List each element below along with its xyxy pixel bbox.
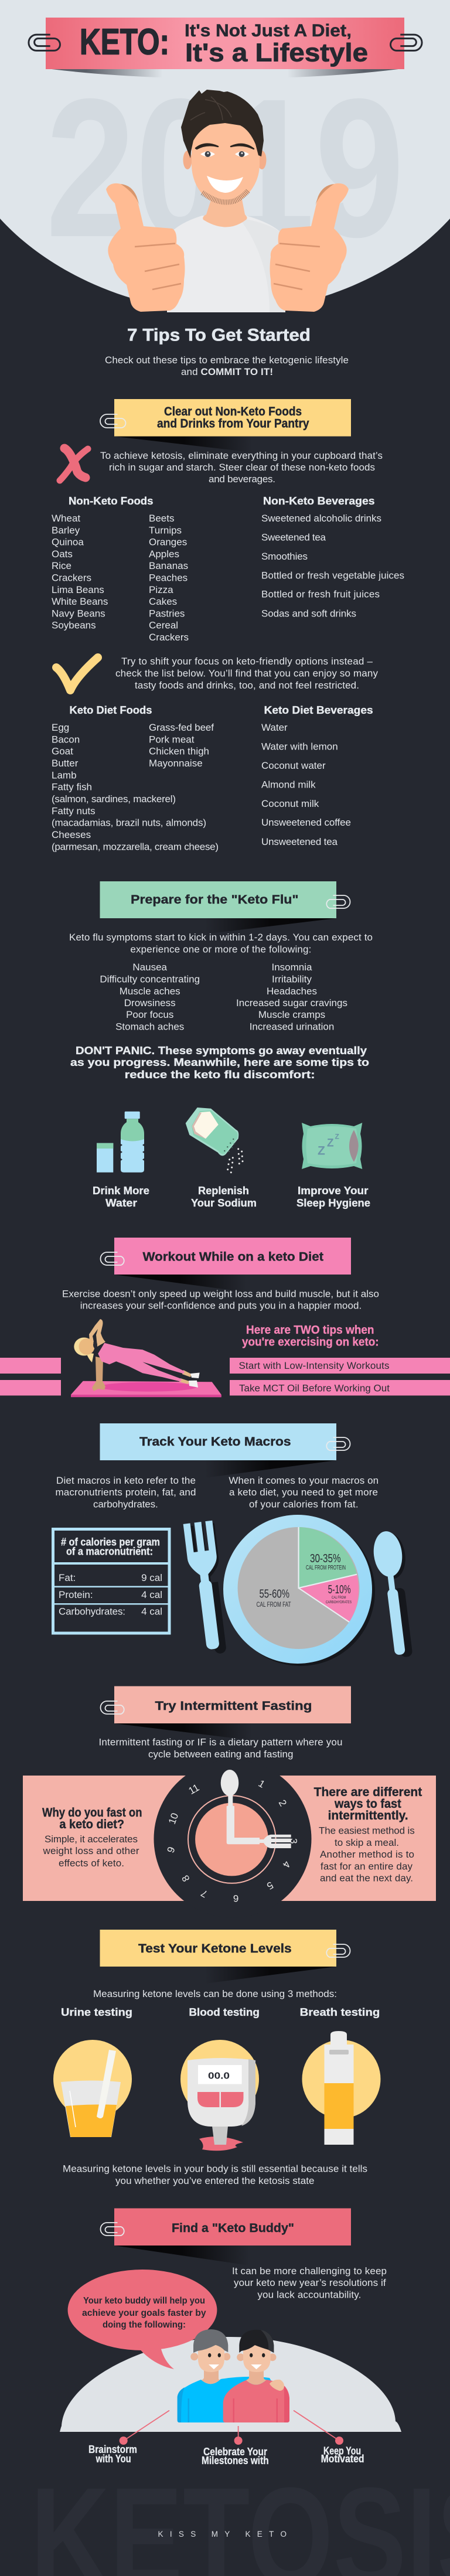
tip bar: low intensity — [230, 1358, 450, 1374]
text: ways to fast: intermittently. — [328, 1809, 408, 1822]
title: KETO: KETO: — [80, 22, 169, 62]
intro text: Check out these tips to embrace the ketogenic lifestyle — [105, 355, 349, 366]
icon: blood glucose meter: 00.0 — [208, 2071, 230, 2081]
list: non-keto foods: Crackers — [52, 572, 91, 584]
clock numbers: 7 — [199, 1887, 209, 1900]
text: why fast — [42, 1806, 142, 1869]
tip labels: Water — [105, 1197, 137, 1209]
pie label: carbohydrates: CARBOHYDRATES — [326, 1600, 352, 1604]
list: keto diet beverages: Unsweetened tea — [261, 836, 338, 847]
text: why fast: Why do you fast on — [42, 1806, 142, 1819]
list: non-keto foods: Turnips — [149, 524, 182, 536]
icon: left paperclip — [29, 35, 60, 50]
list: non-keto foods: Crackers — [149, 632, 189, 643]
table: calories per gram: Carbohydrates: — [59, 1606, 125, 1617]
table: calories per gram: 4 cal — [141, 1589, 162, 1600]
list: symptoms left: Stomach aches — [115, 1021, 184, 1033]
paragraph: keto-friendly options: Try to shift your focus on keto-friendly options instead – — [121, 656, 373, 667]
paragraph: macros left: carbohydrates. — [93, 1499, 158, 1510]
list: non-keto beverages: Bottled or fresh vegetable juices — [261, 570, 404, 581]
tip labels — [93, 1185, 370, 1209]
pie label: fat: 55-60% — [259, 1588, 289, 1601]
pie label: protein: CAL FROM PROTEIN — [306, 1564, 346, 1571]
list: keto diet beverages — [261, 704, 373, 847]
list: non-keto foods: Oranges — [149, 537, 187, 548]
label: brainstorm: Brainstorm — [88, 2444, 137, 2455]
tip labels: Improve Your — [298, 1185, 368, 1197]
paragraph: macros right: of your calories from fat. — [249, 1499, 359, 1510]
list: keto diet beverages: Water — [261, 722, 288, 733]
list: non-keto beverages: Smoothies — [261, 551, 308, 562]
speech bubble — [68, 2270, 217, 2369]
pie label: protein — [306, 1552, 346, 1571]
pie label: fat: CAL FROM FAT — [257, 1600, 291, 1609]
table: calories per gram: # of calories per gram — [61, 1536, 160, 1548]
list: non-keto foods: Soybeans — [52, 620, 96, 631]
table: calories per gram: Protein: — [59, 1589, 93, 1600]
paragraph: measuring essential: Measuring ketone levels in your body is still essential because it tells — [63, 2163, 367, 2175]
label: celebrate — [202, 2446, 269, 2466]
subheading: two tips: you're exercising on keto: — [242, 1336, 379, 1349]
list: keto diet beverages: Unsweetened coffee — [261, 817, 351, 828]
clock numbers — [165, 1778, 299, 1904]
list: keto diet foods: Pork meat — [149, 734, 195, 745]
paragraph: macros left — [55, 1475, 196, 1510]
speech bubble: Your keto buddy will help you — [83, 2296, 205, 2306]
clock numbers: 1 — [257, 1778, 267, 1790]
label: motivated: Keep You — [323, 2445, 361, 2456]
list: non-keto foods: Rice — [52, 560, 71, 571]
paragraph: intermittent fasting: Intermittent fasting or IF is a dietary pattern where you — [98, 1737, 342, 1747]
section banner: clear out non-keto foods: Clear out Non-Keto Foods — [164, 405, 302, 418]
illustration: smiling man with thumbs up — [106, 90, 349, 312]
list: keto diet foods: Butter — [52, 758, 79, 769]
list: non-keto foods: Quinoa — [52, 537, 84, 548]
chart: plate pie of macros — [223, 1515, 375, 1666]
paragraph: accountability — [232, 2265, 387, 2300]
list: symptoms right: Irritability — [272, 973, 312, 984]
list: non-keto foods: Non-Keto Foods — [69, 495, 154, 507]
list: non-keto beverages: Bottled or fresh fruit juices — [261, 589, 380, 600]
label: brainstorm: with You — [96, 2453, 131, 2465]
paragraph: accountability: your keto new year’s resolutions if — [234, 2277, 386, 2288]
callout: don't panic: reduce the keto flu discomfort: — [125, 1069, 315, 1081]
clock illustration — [154, 1760, 312, 1917]
icon: pillow: Z — [327, 1137, 334, 1150]
paragraph: exercise: increases your self-confidence and puts you in a happier mood. — [80, 1300, 362, 1311]
clock numbers: 11 — [187, 1782, 201, 1797]
tip labels: Your Sodium — [191, 1197, 257, 1209]
label: celebrate: Celebrate Your — [203, 2446, 267, 2458]
paragraph: macros right — [229, 1475, 379, 1510]
list: symptoms left: Drowsiness — [124, 997, 176, 1008]
paragraph: keto-friendly options: tasty foods and drinks, too, and not feel restricted. — [135, 680, 359, 691]
paragraph: macros left: macronutrients protein, fat, and — [55, 1487, 196, 1498]
clock numbers: 9 — [165, 1845, 178, 1855]
method labels — [61, 2006, 380, 2018]
list: non-keto foods: Bananas — [149, 560, 188, 571]
paragraph: flu symptoms intro: experience one or more of the following: — [130, 943, 311, 955]
buddy right — [223, 2330, 289, 2422]
decorative left bars — [0, 1358, 61, 1396]
icon: pillow: Z — [335, 1132, 339, 1140]
icon: urine test glass — [53, 2040, 132, 2137]
text: ways to fast: and eat the next day. — [320, 1873, 413, 1884]
ears — [183, 151, 192, 169]
list: keto diet foods: Lamb — [52, 769, 77, 781]
pie label: protein: 30-35% — [310, 1552, 341, 1565]
list: keto diet beverages: Almond milk — [261, 779, 316, 790]
tip bar: MCT oil: Take MCT Oil Before Working Out — [239, 1383, 390, 1394]
list: keto diet foods: Egg — [52, 722, 69, 733]
icon: paperclip — [101, 1701, 124, 1714]
clock numbers: 2 — [277, 1798, 289, 1808]
pie slice: protein — [299, 1527, 357, 1588]
fork hand — [259, 1835, 291, 1848]
clock numbers: 4 — [280, 1859, 293, 1869]
icon: salt shaker — [186, 1108, 244, 1173]
stubble — [202, 190, 248, 202]
icon: pillow — [302, 1123, 362, 1169]
list: non-keto foods: Navy Beans — [52, 608, 105, 619]
list: non-keto foods: Oats — [52, 548, 73, 560]
list: non-keto foods: Barley — [52, 524, 80, 536]
pie slice: carbohydrates — [299, 1575, 359, 1622]
pie label: carbohydrates: CAL FROM — [332, 1596, 346, 1600]
supporting arm — [92, 1357, 105, 1391]
text: ways to fast: fast for an entire day — [321, 1861, 412, 1872]
icon: paperclip — [326, 1437, 350, 1450]
icon: yellow check mark — [56, 657, 98, 690]
label: celebrate: Milestones with — [202, 2455, 269, 2466]
eyes — [200, 151, 249, 157]
spoon hand — [221, 1770, 260, 1844]
list: keto diet foods: (salmon, sardines, mackerel) — [52, 793, 176, 805]
paragraph: eliminate foods: To achieve ketosis, eliminate everything in your cupboard that’s — [100, 450, 383, 461]
left fist — [106, 183, 185, 312]
list: non-keto beverages: Sodas and soft drinks — [261, 608, 356, 619]
list: symptoms left — [100, 962, 200, 1033]
pie label: carbohydrates — [326, 1583, 352, 1604]
face — [192, 120, 260, 205]
section banner: workout: Workout While on a keto Diet — [143, 1250, 323, 1263]
icon: paperclip — [326, 1944, 350, 1957]
icon: right paperclip — [391, 35, 422, 50]
list: non-keto beverages: Sweetened tea — [261, 532, 326, 543]
list: non-keto foods: Cereal — [149, 620, 178, 631]
list: keto diet foods: (parmesan, mozzarella, cream cheese) — [52, 841, 219, 852]
label: motivated — [321, 2445, 364, 2465]
buddy left — [178, 2329, 275, 2422]
list: non-keto foods: Apples — [149, 548, 179, 560]
method labels: Breath testing — [300, 2006, 380, 2018]
paragraph: keto-friendly options: check the list below. You’ll find that you can enjoy so many — [115, 668, 379, 679]
footer brand: KISS MY KETO — [158, 2530, 287, 2538]
list: non-keto foods: Pastries — [149, 608, 185, 619]
connector: brainstorm — [120, 2411, 169, 2445]
shirt — [167, 216, 285, 312]
callout: don't panic: DON'T PANIC. These symptoms go away eventually — [76, 1045, 367, 1057]
list: non-keto foods — [52, 495, 189, 643]
list: keto diet beverages: Coconut milk — [261, 798, 319, 809]
section banner: intermittent fasting: Try Intermittent Fasting — [155, 1699, 312, 1713]
icon: paperclip — [100, 414, 125, 428]
pie label: fat — [257, 1588, 291, 1609]
icon: pillow: Z — [318, 1144, 325, 1158]
connector: motivated — [294, 2411, 343, 2445]
list: non-keto foods: Lima Beans — [52, 584, 104, 595]
clock numbers: 10 — [166, 1811, 180, 1826]
text: ways to fast: The easiest method is — [319, 1825, 415, 1836]
section banner: keto flu: Prepare for the "Keto Flu" — [131, 893, 299, 907]
icon: breath analyzer — [302, 2031, 381, 2145]
icon: red X — [60, 448, 88, 481]
paragraph: eliminate foods: rich in sugar and starch. Steer clear of these non-keto foods — [109, 462, 375, 473]
table: calories per gram — [53, 1529, 170, 1633]
yoga mat — [71, 1381, 221, 1397]
list: non-keto beverages: Non-Keto Beverages — [263, 495, 375, 507]
section banner: ketone levels: Test Your Ketone Levels — [138, 1942, 292, 1955]
illustration: two buddies — [178, 2329, 289, 2422]
section banner: keto buddy: Find a "Keto Buddy" — [172, 2221, 294, 2235]
paragraph: exercise — [62, 1288, 379, 1311]
body suit — [98, 1343, 185, 1382]
tip labels: Replenish — [198, 1185, 249, 1197]
text: ways to fast — [314, 1786, 422, 1884]
illustration: woman doing side plank — [71, 1319, 221, 1397]
list: keto diet foods: Fatty fish — [52, 782, 92, 793]
icon: paperclip — [101, 1252, 124, 1265]
right fist — [270, 183, 349, 312]
title: line one: It's Not Just A Diet, — [185, 21, 352, 40]
hair — [181, 90, 264, 158]
title: line two: It's a Lifestyle — [185, 39, 368, 67]
list: symptoms right: Headaches — [267, 986, 317, 997]
section banner: macros: Track Your Keto Macros — [139, 1435, 291, 1449]
list: symptoms right — [236, 962, 347, 1033]
section banner: workout — [101, 1238, 351, 1292]
clock numbers: 5 — [265, 1879, 275, 1892]
section banner: keto flu — [100, 881, 350, 934]
neck — [203, 196, 247, 227]
table: calories per gram: 4 cal — [141, 1606, 162, 1617]
paragraph: flu symptoms intro: Keto flu symptoms start to kick in within 1-2 days. You can expect to — [69, 932, 373, 943]
speech bubble: achieve your goals faster by — [82, 2308, 206, 2318]
list: keto diet foods: Bacon — [52, 734, 80, 745]
list: keto diet foods: Grass-fed beef — [149, 722, 214, 733]
paragraph: measuring methods: Measuring ketone levels can be done using 3 methods: — [93, 1988, 337, 1999]
eyebrows — [196, 144, 254, 149]
section banner: keto buddy — [101, 2208, 351, 2265]
callout: don't panic: as you progress. Meanwhile, here are some tips to — [70, 1057, 369, 1068]
list: non-keto foods: White Beans — [52, 596, 108, 607]
list: symptoms right: Increased sugar cravings — [236, 997, 347, 1008]
text: why fast: Simple, it accelerates — [45, 1834, 138, 1845]
paragraph: macros right: a keto diet, you need to get more — [229, 1487, 378, 1498]
text: ways to fast: Another method is to — [320, 1849, 414, 1860]
method labels: Blood testing — [189, 2006, 260, 2018]
list: keto diet beverages: Keto Diet Beverages — [264, 704, 373, 716]
tip bar: low intensity: Start with Low-Intensity Workouts — [239, 1360, 389, 1371]
list: symptoms left: Nausea — [132, 962, 168, 973]
paragraph: macros left: Diet macros in keto refer to the — [56, 1475, 196, 1486]
icon: fork — [183, 1520, 230, 1656]
raised arm — [89, 1319, 105, 1347]
section banner: intermittent fasting — [101, 1686, 351, 1740]
text: why fast: effects of keto. — [59, 1858, 124, 1869]
text: why fast: a keto diet? — [59, 1818, 124, 1831]
speech bubble: doing the following: — [103, 2320, 186, 2330]
list: symptoms left: Muscle aches — [120, 986, 180, 997]
section banner: macros — [100, 1423, 350, 1478]
label: brainstorm — [88, 2444, 137, 2465]
icon: blood glucose meter — [180, 2040, 259, 2151]
list: symptoms right: Insomnia — [272, 962, 312, 973]
list: keto diet foods: Fatty nuts — [52, 805, 96, 816]
panel: fasting background — [23, 1776, 436, 1901]
list: non-keto beverages: Sweetened alcoholic drinks — [261, 513, 381, 524]
list: non-keto foods: Peaches — [149, 572, 188, 584]
tip labels: Drink More — [93, 1185, 149, 1197]
list: keto diet beverages: Coconut water — [261, 760, 326, 771]
clock numbers: 6 — [233, 1893, 238, 1904]
section banner: clear out non-keto foods: and Drinks from Your Pantry — [157, 417, 309, 431]
list: keto diet beverages: Water with lemon — [261, 741, 338, 752]
text: ways to fast: There are different — [314, 1786, 422, 1799]
connector: celebrate — [234, 2426, 243, 2445]
section banner: clear out non-keto foods — [100, 399, 351, 452]
list: keto diet foods: Goat — [52, 746, 73, 757]
paragraph: measuring essential: you whether you’ve entered the ketosis state — [115, 2175, 314, 2186]
icon: spoon — [371, 1529, 417, 1660]
heading: 7 tips: 7 Tips To Get Started — [127, 326, 311, 345]
list: non-keto foods: Cakes — [149, 596, 177, 607]
list: keto diet foods: Chicken thigh — [149, 746, 209, 757]
paragraph: intermittent fasting — [98, 1737, 342, 1760]
paragraph: accountability: It can be more challenging to keep — [232, 2265, 387, 2277]
intro text: and COMMIT TO IT! — [181, 366, 273, 377]
label: motivated: Motivated — [321, 2453, 364, 2465]
list: keto diet foods — [52, 704, 219, 852]
text: why fast: weight loss and other — [42, 1845, 139, 1856]
tip bar: MCT oil — [230, 1380, 450, 1396]
list: non-keto foods: Pizza — [149, 584, 173, 595]
paragraph: exercise: Exercise doesn’t only speed up weight loss and build muscle, but it also — [62, 1288, 379, 1300]
list: symptoms right: Increased urination — [250, 1021, 334, 1033]
title banner — [29, 18, 422, 77]
list: keto diet foods: Mayonnaise — [149, 758, 203, 769]
list: keto diet foods: (macadamias, brazil nuts, almonds) — [52, 817, 206, 829]
list: symptoms left: Difficulty concentrating — [100, 973, 200, 984]
list: non-keto beverages — [261, 495, 404, 619]
smile — [207, 176, 243, 193]
paragraph: intermittent fasting: cycle between eating and fasting — [148, 1749, 293, 1760]
list: keto diet foods: Keto Diet Foods — [69, 704, 152, 716]
icon: paperclip — [326, 895, 350, 908]
paragraph: eliminate foods: and beverages. — [209, 473, 275, 485]
header background — [0, 0, 450, 312]
method labels: Urine testing — [61, 2006, 132, 2018]
icon: water glass and bottle — [97, 1112, 144, 1173]
table: calories per gram: of a macronutrient: — [66, 1546, 153, 1558]
icon: paperclip — [101, 2223, 124, 2236]
list: symptoms right: Muscle cramps — [258, 1009, 325, 1020]
table: calories per gram: 9 cal — [141, 1572, 162, 1583]
pie label: carbohydrates: 5-10% — [328, 1583, 351, 1596]
clock numbers: 3 — [288, 1838, 299, 1844]
callout: don't panic — [70, 1045, 369, 1081]
list: symptoms left: Poor focus — [126, 1009, 173, 1020]
list: keto diet foods: Cheeses — [52, 829, 91, 840]
tip labels: Sleep Hygiene — [296, 1197, 370, 1209]
head and hair — [74, 1337, 94, 1356]
ankles — [179, 1370, 192, 1384]
paragraph: accountability: you lack accountability. — [257, 2289, 361, 2300]
section banner: ketone levels — [100, 1930, 350, 1984]
list: non-keto foods: Wheat — [52, 513, 80, 524]
intro text — [105, 355, 349, 377]
dome background — [60, 2337, 401, 2432]
shoes — [189, 1372, 200, 1388]
list: non-keto foods: Beets — [149, 513, 174, 524]
paragraph: measuring essential — [63, 2163, 367, 2186]
text: ways to fast: to skip a meal. — [335, 1837, 399, 1848]
paragraph: keto-friendly options — [115, 656, 379, 691]
paragraph: macros right: When it comes to your macros on — [229, 1475, 379, 1486]
paragraph: flu symptoms intro — [69, 932, 373, 955]
clock numbers: 8 — [179, 1873, 192, 1883]
text: ways to fast: ways to fast — [334, 1797, 401, 1811]
subheading: two tips: Here are TWO tips when — [246, 1324, 374, 1337]
subheading: two tips — [242, 1324, 379, 1349]
table: calories per gram: Fat: — [59, 1572, 76, 1583]
paragraph: eliminate foods — [100, 450, 383, 485]
